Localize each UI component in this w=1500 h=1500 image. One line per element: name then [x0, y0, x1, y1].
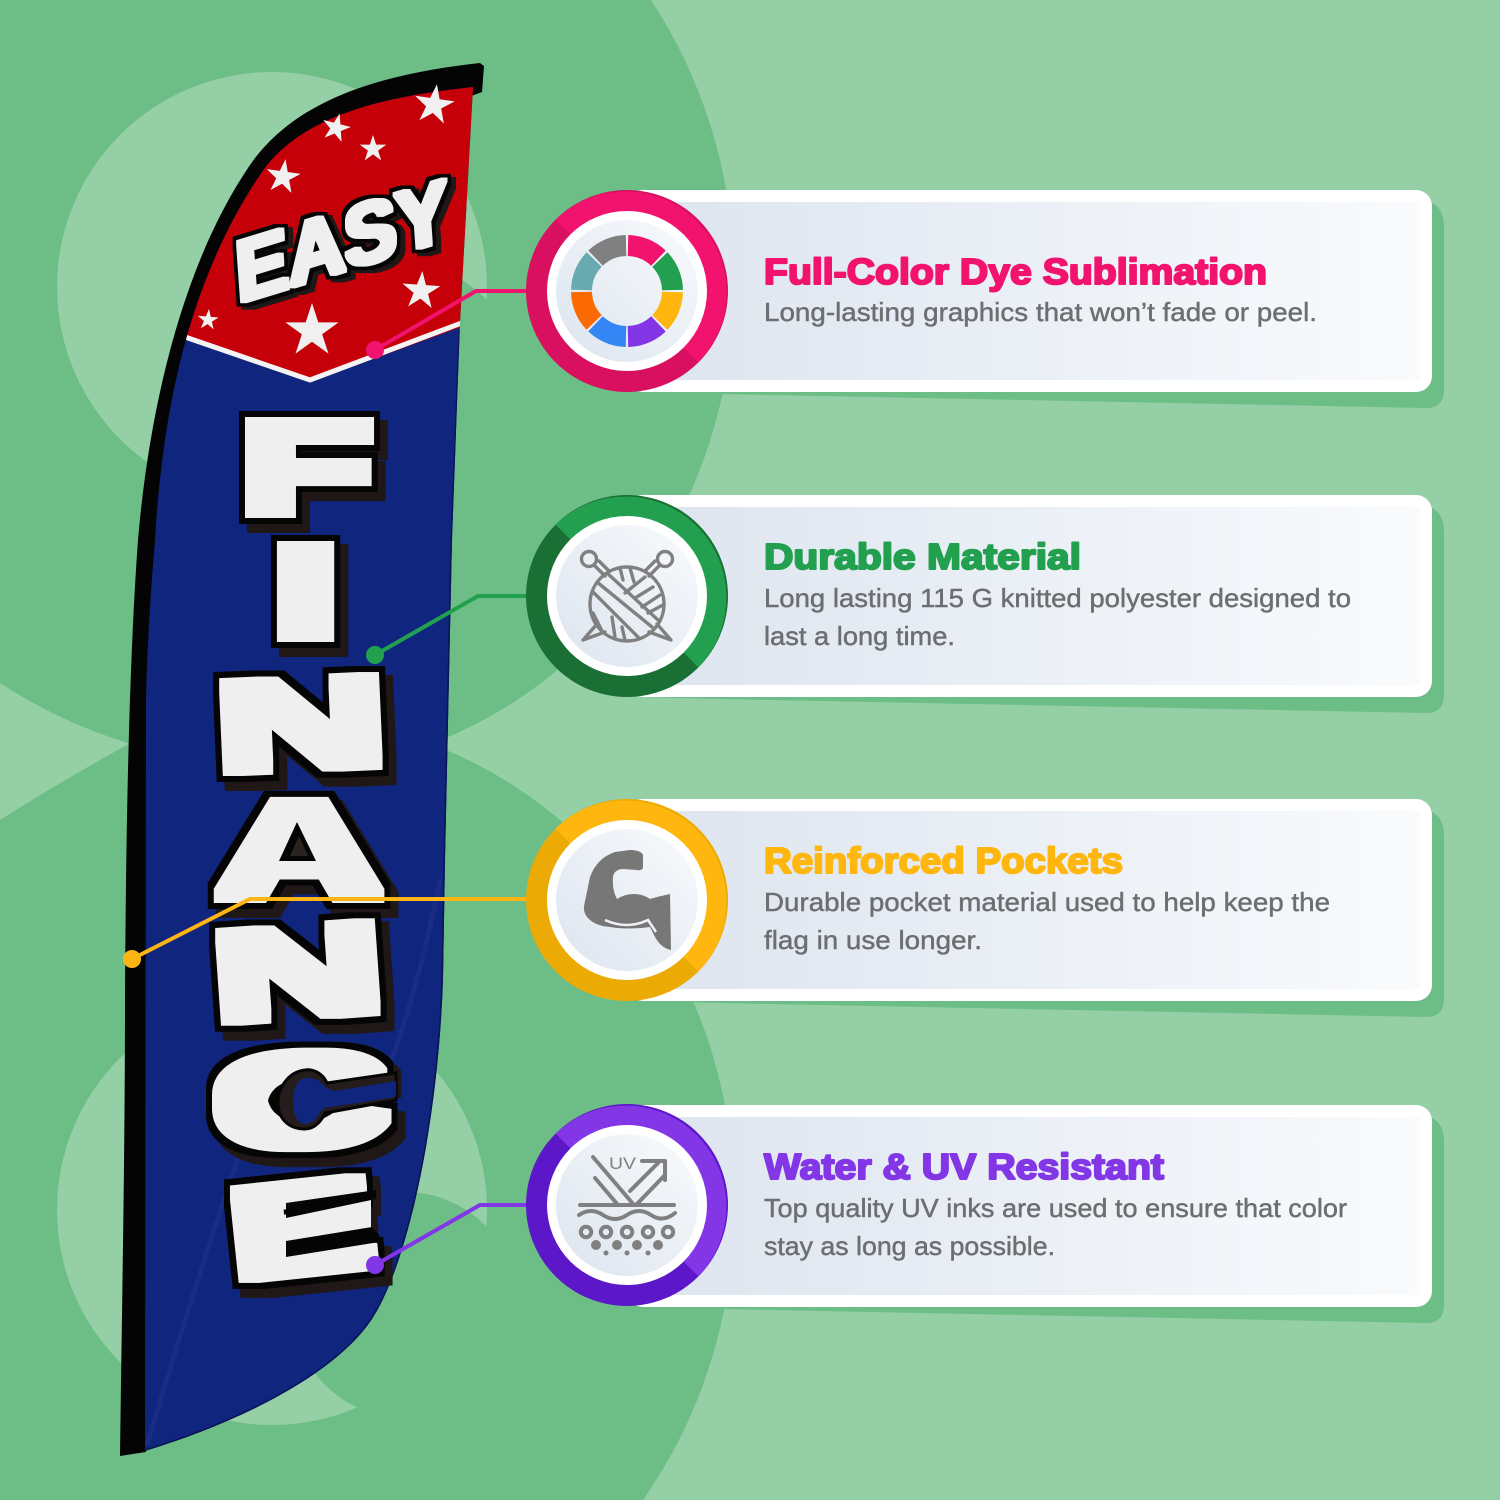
flag text: FINANCE	[207, 397, 391, 1304]
card	[627, 495, 1432, 697]
description: stay as long as possible.	[764, 1231, 1055, 1261]
icon: flexed arm badge	[526, 799, 728, 1001]
card inner panel	[627, 1117, 1420, 1295]
description: Durable pocket material used to help keep the	[764, 887, 1330, 917]
connector: purple	[366, 1205, 530, 1274]
description	[764, 887, 1330, 955]
flag text: FINANCE: N	[212, 653, 390, 796]
card shadow	[640, 809, 1444, 1017]
panel: full-color dye sublimation	[627, 190, 1444, 408]
description	[764, 1193, 1347, 1261]
connector: green	[366, 596, 530, 664]
flag text: FINANCE: I	[270, 521, 342, 662]
icon: yarn and needles badge	[526, 495, 728, 697]
letter details: counters	[278, 822, 396, 1257]
connector: pink	[366, 291, 530, 359]
card shadow	[640, 1115, 1444, 1323]
panel: durable material	[627, 495, 1444, 713]
description: Long lasting 115 G knitted polyester designed to	[764, 583, 1351, 613]
color wheel	[563, 227, 691, 355]
description: flag in use longer.	[764, 925, 982, 955]
connector: yellow	[123, 899, 530, 968]
flag text: FINANCE: C	[208, 1025, 391, 1176]
flag text: FINANCE: F	[241, 397, 372, 538]
card shadow	[640, 505, 1444, 713]
flag pole sleeve	[120, 63, 484, 1456]
flag text: EASY: EASY	[233, 160, 451, 321]
description: last a long time.	[764, 621, 955, 651]
icon: color wheel badge	[526, 190, 728, 392]
card	[627, 799, 1432, 1001]
uv layers: UV	[609, 1154, 637, 1173]
card	[627, 1105, 1432, 1307]
flag text: FINANCE: N	[207, 899, 388, 1046]
panel: reinforced pockets	[627, 799, 1444, 1017]
heading: Reinforced Pockets	[764, 840, 1123, 881]
description: Top quality UV inks are used to ensure that color	[764, 1193, 1347, 1223]
flexed arm	[584, 850, 671, 950]
flag text: FINANCE: E	[223, 1153, 380, 1304]
yarn ball	[582, 552, 672, 641]
card inner panel	[627, 811, 1420, 989]
feather flag	[120, 60, 484, 1460]
stars	[197, 81, 457, 354]
card	[627, 190, 1432, 392]
description	[764, 583, 1351, 651]
heading: Full-Color Dye Sublimation	[764, 251, 1267, 292]
card inner panel	[627, 507, 1420, 685]
heading: Water & UV Resistant	[764, 1146, 1164, 1187]
card inner panel	[627, 202, 1420, 380]
description: Long-lasting graphics that won’t fade or peel.	[764, 297, 1317, 327]
card shadow	[640, 200, 1444, 408]
heading: Durable Material	[764, 536, 1081, 577]
panel: water and uv resistant	[627, 1105, 1444, 1323]
flag fabric	[130, 60, 480, 1460]
uv layers	[579, 1154, 675, 1256]
flag text: FINANCE: A	[218, 775, 380, 925]
icon: uv resistance badge	[526, 1104, 728, 1306]
